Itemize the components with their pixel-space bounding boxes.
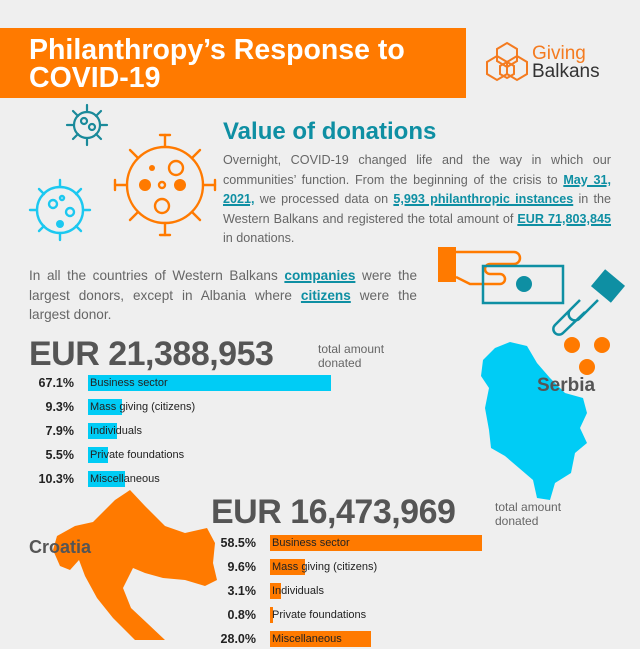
label: Serbia: Serbia <box>537 375 595 396</box>
bar chart: Croatia <box>220 535 482 647</box>
map: Croatia <box>53 490 217 640</box>
label: Croatia: Croatia <box>29 537 91 557</box>
Serbia total: donated <box>318 356 361 370</box>
bar chart: Serbia: Miscellaneous <box>90 473 160 485</box>
bar chart: Serbia: Individuals <box>90 425 142 437</box>
Croatia total <box>211 493 561 531</box>
heading: value of donations: Value of donations <box>223 118 436 145</box>
paragraph: companies: In all the countries of Western Balkans companies were the largest donors, except in Albania where citizens were the largest donor. <box>29 268 417 322</box>
bar chart: Croatia: 3.1% <box>228 584 256 598</box>
logo: Balkans <box>532 61 600 82</box>
bar chart: Serbia: 9.3% <box>46 400 74 414</box>
title banner <box>0 28 466 98</box>
logo: Giving <box>532 43 586 64</box>
bar chart: Serbia: 10.3% <box>39 472 74 486</box>
bar chart: Serbia: 7.9% <box>46 424 74 438</box>
logo <box>486 42 600 82</box>
bar chart: Croatia: Individuals <box>272 585 324 597</box>
Serbia total: total amount <box>318 342 384 356</box>
title banner: Philanthropy’s Response to <box>29 34 405 66</box>
bar chart: Croatia: 9.6% <box>228 560 256 574</box>
Croatia total: EUR 16,473,969 <box>211 493 455 531</box>
bar chart: Serbia <box>38 375 331 487</box>
bar chart: Croatia: 0.8% <box>228 608 256 622</box>
icon: viruses <box>28 104 216 242</box>
Serbia total <box>29 335 384 373</box>
title banner: COVID-19 <box>29 62 160 94</box>
bar chart: Croatia: Miscellaneous <box>272 633 342 645</box>
bar chart: Croatia: 58.5% <box>221 536 256 550</box>
Serbia total: EUR 21,388,953 <box>29 335 273 373</box>
bar chart: Serbia: 67.1% <box>39 376 74 390</box>
bar chart: Serbia: Business sector <box>90 377 168 389</box>
bar chart: Croatia: Private foundations <box>272 609 366 621</box>
bar chart: Croatia: 28.0% <box>221 632 256 646</box>
icon: hands giving money <box>438 247 625 375</box>
Croatia total: total amount <box>495 500 561 514</box>
Croatia total: donated <box>495 514 538 528</box>
paragraph: overview: Overnight, COVID-19 changed life and the way in which our communities’ function. From the beginning of the crisis to May 31, 2021, we processed data on 5,993 philanthropic instances in the Western Balkans and registered the total amount of EUR 71,803,845 in donations. <box>223 153 611 245</box>
bar chart: Serbia: Private foundations <box>90 449 184 461</box>
bar chart: Croatia: Mass giving (citizens) <box>272 561 377 573</box>
bar chart: Serbia: Mass giving (citizens) <box>90 401 195 413</box>
map: Serbia <box>481 342 587 500</box>
bar chart: Croatia: Business sector <box>272 537 350 549</box>
bar chart: Serbia: 5.5% <box>46 448 74 462</box>
